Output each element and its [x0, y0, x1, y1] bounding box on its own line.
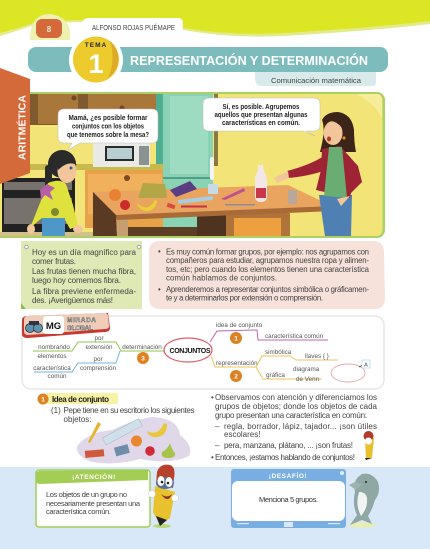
right labels: gráfica: [266, 372, 285, 379]
title banner: [28, 47, 388, 72]
left labels: extensión: [86, 344, 113, 351]
speech bubble: girl: conjuntos con los objetos: [72, 122, 144, 130]
subtitle tab: Comunicación matemática: [271, 78, 361, 85]
speech bubble: mother: Sí, es posible. Agrupemos: [222, 102, 300, 111]
example text: objetos:: [64, 415, 92, 424]
pencil mascot: [148, 465, 178, 528]
note: green: luego hoy comemos fibra.: [32, 276, 121, 285]
intro text panel: común hablamos de conjuntos.: [166, 274, 277, 282]
mind map panel: 2: [234, 374, 238, 380]
page number tab: [30, 14, 70, 40]
explanation column: grupo presentan una característica en común:: [215, 411, 367, 420]
section heading: idea de conjunto: [38, 393, 118, 404]
microwave: [93, 143, 150, 167]
explanation column: regla, borrador, lápiz, tajador... ¡son útiles: [224, 422, 377, 431]
mirada global header: [22, 313, 110, 338]
right labels: característica común: [265, 333, 324, 340]
example text: [51, 406, 194, 424]
intro text panel: te y a determinarlos por extensión o comprensión.: [166, 294, 323, 302]
tema badge: TEMA: [85, 42, 107, 49]
mind map panel: 1: [234, 336, 238, 342]
mirada global header: MG: [46, 321, 61, 332]
speech bubble: girl: Mamá, ¿es posible formar: [68, 113, 148, 122]
attention box: [36, 470, 150, 527]
left labels: por: [93, 356, 103, 363]
attention box: necesariamente presentan una: [46, 499, 141, 508]
right labels: [216, 322, 329, 383]
explanation column: Entonces, ¡estamos hablando de conjuntos!: [215, 453, 355, 462]
left labels: común: [48, 373, 67, 380]
explanation column: •: [211, 453, 214, 462]
intro text panel: Es muy común formar grupos, por ejemplo: nos agrupamos con: [166, 248, 369, 256]
icon: small pencil mascot: [364, 431, 374, 460]
left labels: elementos: [37, 353, 67, 360]
explanation column: Observamos con atención y diferenciamos los: [215, 393, 377, 402]
numbered markers: [137, 332, 242, 382]
left labels: nombrando: [38, 344, 70, 351]
right labels: llaves { }: [305, 353, 329, 360]
orange subject tab: [0, 68, 30, 184]
explanation column: escolares!: [224, 430, 260, 439]
note: green: des. ¡Averigüemos más!: [32, 296, 113, 305]
speech bubble: mother: aquellos que presentan algunas: [214, 110, 308, 119]
right labels: simbólica: [265, 349, 292, 356]
challenge box: [231, 469, 346, 528]
attention box: Los objetos de un grupo no: [46, 490, 127, 499]
branch lines: [33, 330, 338, 379]
speech bubble: mother: [203, 98, 320, 136]
right labels: diagrama: [293, 366, 320, 373]
subtitle tab: [255, 72, 376, 86]
mother: [274, 112, 362, 236]
title banner: REPRESENTACIÓN Y DETERMINACIÓN: [130, 53, 368, 68]
girl: [27, 150, 83, 236]
page number tab: 8: [47, 25, 52, 34]
dolphin: [348, 474, 379, 528]
left labels: por: [94, 335, 104, 342]
blue footer band: [0, 467, 430, 549]
explanation column: –: [215, 441, 220, 450]
intro text panel: •: [158, 285, 161, 294]
left labels: comprensión: [80, 365, 117, 372]
mirada global header: GLOBAL: [67, 325, 93, 332]
tema badge: 1: [88, 49, 104, 79]
speech bubble: girl: que tenemos sobre la mesa?: [67, 130, 149, 139]
kitchen furniture: [0, 94, 218, 236]
mirada global header: MIRADA: [67, 317, 96, 324]
tema badge: [69, 33, 123, 87]
right labels: de Venn: [296, 376, 320, 383]
mind map panel: 3: [141, 356, 145, 362]
note: green: La fibra previene enfermeda-: [32, 287, 136, 296]
example text: Pepe tiene en su escritorio los siguientes: [64, 406, 194, 415]
right labels: representación: [216, 360, 258, 367]
note: green: comer frutas.: [32, 257, 76, 266]
central node: [164, 338, 212, 362]
objects on the table: [109, 165, 297, 211]
speech bubble: girl: [58, 109, 158, 150]
note: green: Las frutas tienen mucha fibra,: [32, 267, 136, 276]
example text: (1): [51, 406, 61, 415]
left labels: [33, 335, 162, 380]
note: green: Hoy es un día magnífico para: [32, 248, 137, 257]
left labels: determinación: [122, 344, 162, 351]
intro text panel: tos, etc; pero cuando los elementos tienen una característica: [166, 265, 370, 274]
right labels: idea de conjunto: [216, 322, 263, 329]
attention box: ¡ATENCIÓN!: [72, 472, 116, 481]
explanation column: grupos de objetos; donde los objetos de cada: [215, 402, 378, 411]
challenge box: ¡DESAFÍO!: [269, 471, 307, 480]
attention box: característica común.: [46, 507, 111, 516]
author tab: [82, 18, 183, 36]
venn diagram: [331, 360, 370, 382]
explanation column: pera, manzana, plátano, ... ¡son frutas!: [224, 441, 353, 450]
left labels: característica: [33, 365, 71, 372]
orange subject tab: ARITMÉTICA: [16, 95, 28, 160]
intro text panel: •: [158, 247, 161, 256]
central node: CONJUNTOS: [170, 348, 211, 355]
mind map panel: [22, 313, 384, 389]
explanation column: –: [215, 422, 220, 431]
challenge box: Menciona 5 grupos.: [259, 495, 318, 504]
header band: [0, 0, 430, 37]
author tab: ALFONSO ROJAS PUÉMAPE: [92, 23, 175, 32]
intro text panel: compañeros para estudiar, agrupamos nuestra ropa y alimen-: [166, 256, 369, 265]
objects illustration: [77, 417, 190, 463]
section heading: idea de conjunto: Idea de conjunto: [52, 395, 109, 404]
intro text panel: [149, 241, 385, 309]
section heading: idea de conjunto: 1: [41, 396, 45, 404]
speech bubble: mother: características en común.: [222, 118, 300, 127]
venn diagram: A: [364, 362, 368, 368]
explanation column: [211, 393, 378, 462]
explanation column: •: [211, 393, 214, 402]
note: green: [21, 241, 142, 309]
table: [93, 185, 334, 236]
illustration scene: [0, 92, 385, 238]
intro text panel: Aprenderemos a representar conjuntos simbólica o gráficamen-: [166, 285, 369, 294]
